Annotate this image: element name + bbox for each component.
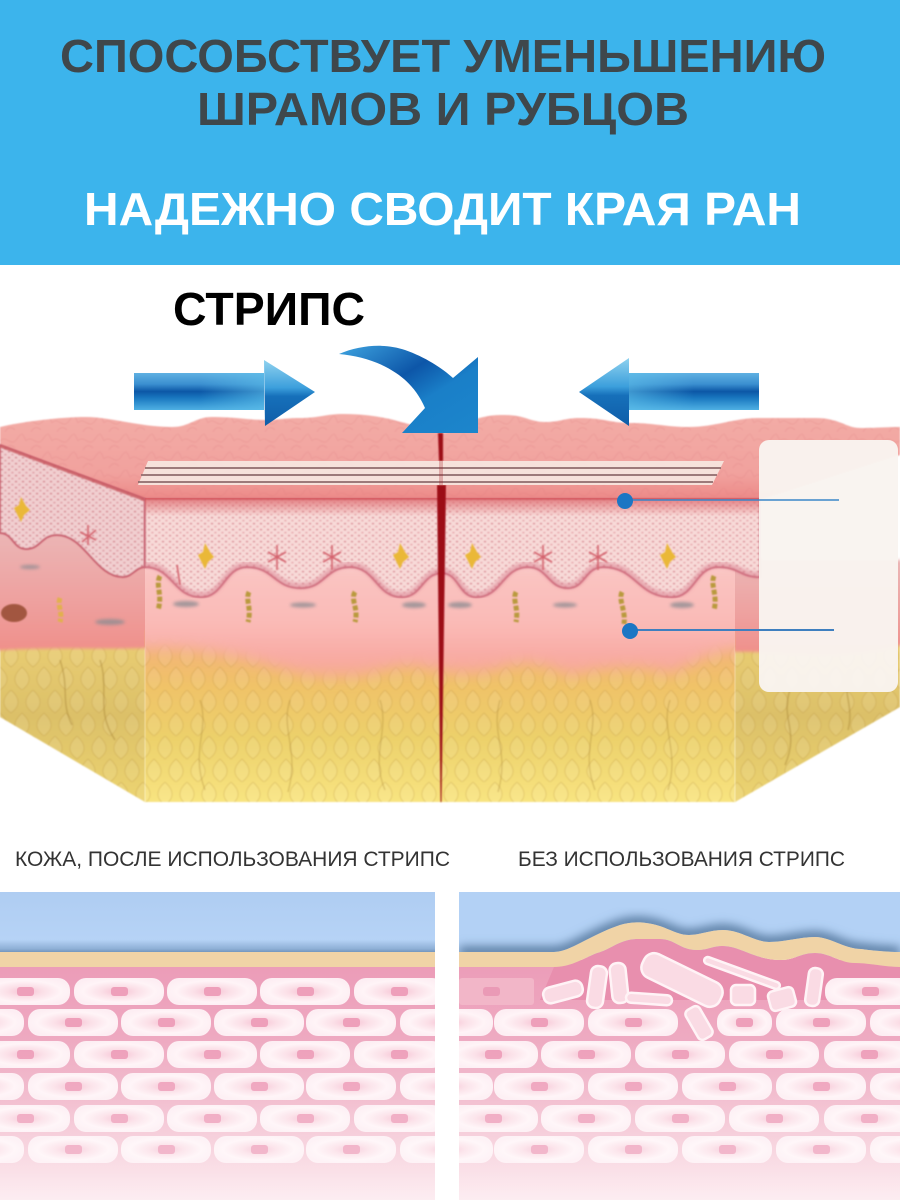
- subtitle: closes wound edges: НАДЕЖНО СВОДИТ КРАЯ РАН: [84, 183, 801, 235]
- panel: scarred skin: [459, 892, 900, 1200]
- caption: without strips: БЕЗ ИСПОЛЬЗОВАНИЯ СТРИПС: [518, 848, 845, 871]
- epidermis lower rim: [145, 565, 760, 595]
- fat layer front: [145, 630, 735, 802]
- left panel beige layer: [0, 952, 435, 967]
- dermis front: [130, 560, 750, 677]
- fibroblasts: [20, 565, 694, 625]
- collagen strands: [59, 576, 715, 624]
- adhesive strip: [138, 461, 724, 485]
- scar tissue cells: [542, 949, 824, 1042]
- right panel tissue: [459, 960, 900, 1200]
- right panel cells: [459, 978, 900, 1163]
- header background: [0, 0, 900, 265]
- epidermis left side: [0, 445, 145, 577]
- title: reduces scars: ШРАМОВ И РУБЦОВ: [197, 83, 689, 135]
- callout pointer: upper: [617, 493, 839, 509]
- left panel sky: [0, 892, 435, 953]
- skin cross-section diagram: [0, 346, 900, 802]
- right panel raised tissue: [540, 939, 900, 1000]
- basement edge: [145, 498, 760, 516]
- right panel sky: [459, 892, 900, 957]
- panel: healthy skin: [0, 892, 435, 1200]
- right panel shadow above scar: [459, 922, 900, 952]
- arrow: curved down: [339, 346, 478, 433]
- left panel fade: [0, 1082, 435, 1200]
- right panel fade: [459, 1082, 900, 1200]
- dermis side faces: [0, 530, 150, 652]
- pigment cluster: [1, 604, 27, 622]
- callout pointer: lower: [622, 623, 834, 639]
- capillaries: [80, 525, 607, 585]
- top skin surface: [0, 414, 900, 500]
- white label box: [759, 440, 898, 692]
- right panel beige layer: [459, 922, 900, 967]
- caption: with strips: КОЖА, ПОСЛЕ ИСПОЛЬЗОВАНИЯ СТРИПС: [15, 848, 450, 871]
- arrow: left: [579, 358, 759, 426]
- left panel cells: [0, 978, 435, 1163]
- epidermis front: [145, 499, 760, 597]
- pigment cells: [14, 497, 676, 569]
- title: reduces scars: СПОСОБСТВУЕТ УМЕНЬШЕНИЮ: [60, 30, 826, 82]
- arrow: right: [134, 360, 315, 426]
- title: reduces scars: [60, 30, 826, 135]
- fat layer sides: [0, 630, 900, 802]
- label: strips: СТРИПС: [173, 283, 365, 335]
- left panel tissue: [0, 967, 435, 1200]
- wound cut: [437, 433, 446, 802]
